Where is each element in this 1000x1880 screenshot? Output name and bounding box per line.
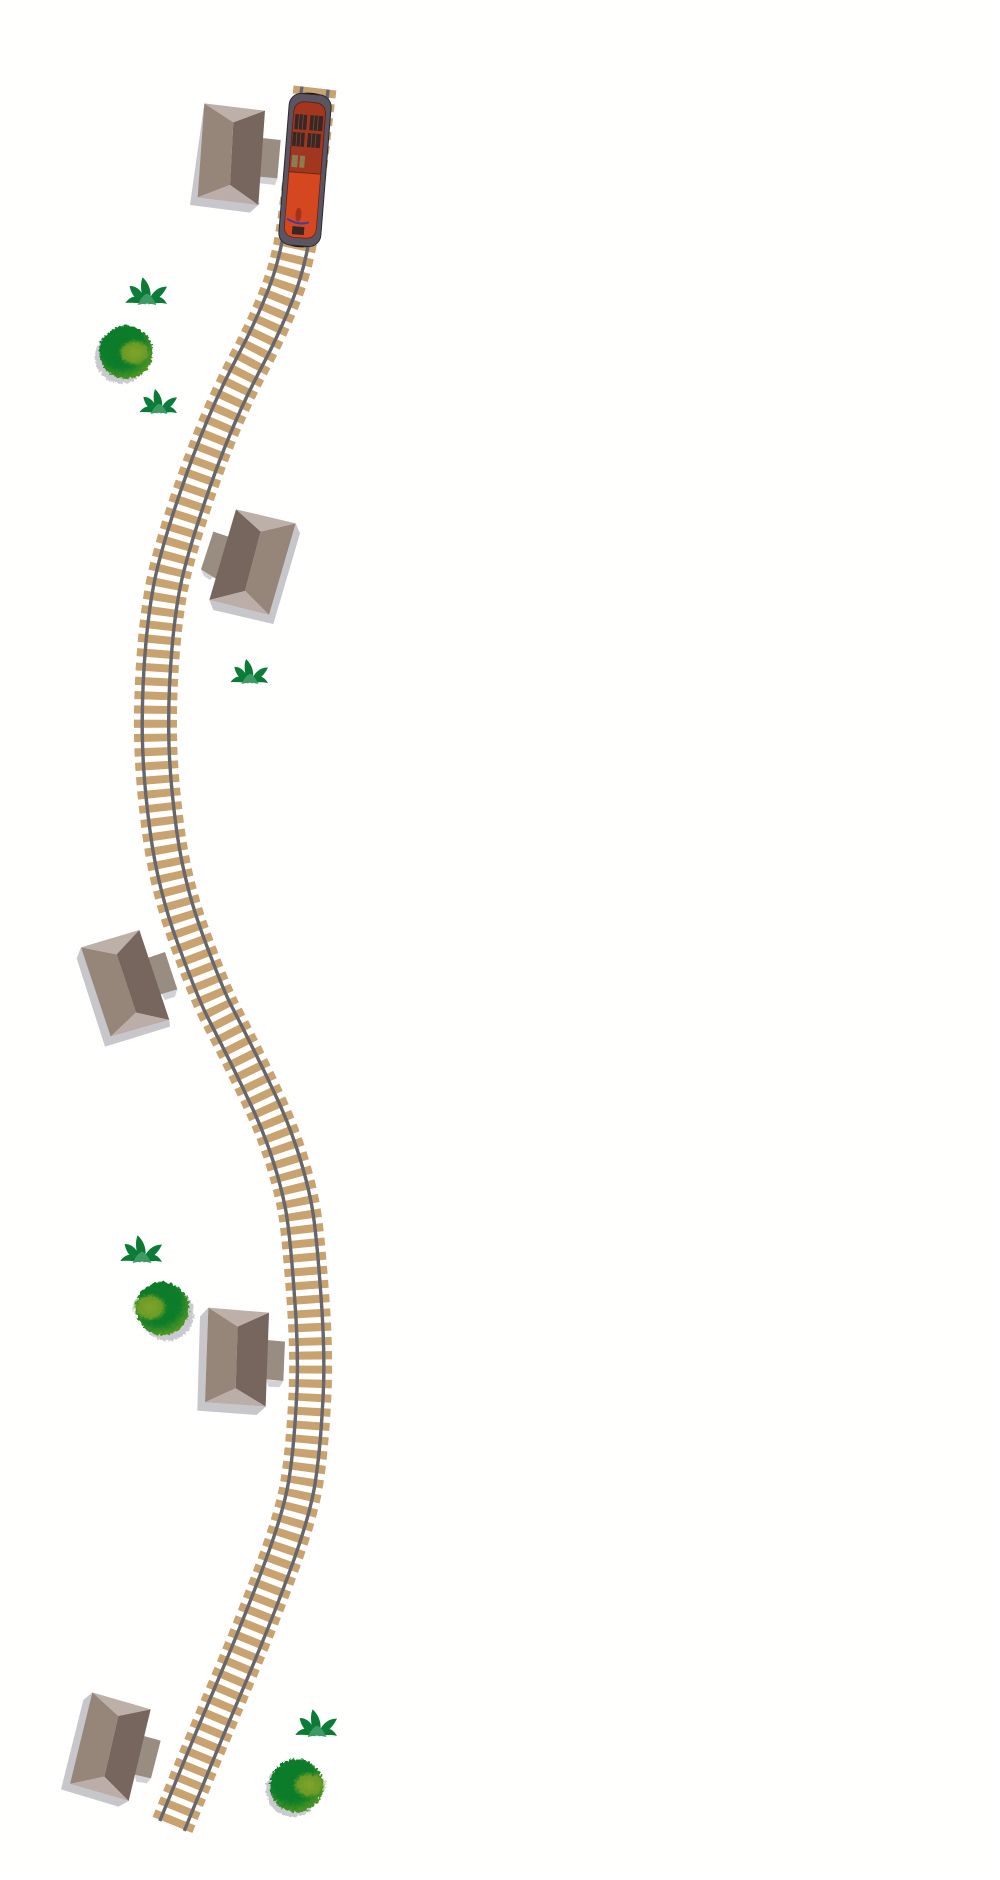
railway track bbox=[155, 88, 315, 1826]
train carriage bbox=[278, 91, 332, 249]
blue band bbox=[287, 219, 309, 224]
buffers bbox=[284, 92, 326, 248]
chassis bbox=[278, 93, 332, 247]
house 3 bbox=[77, 930, 177, 1047]
house 2 bbox=[201, 509, 300, 624]
grilles bbox=[285, 114, 323, 236]
roof rear section bbox=[289, 101, 326, 174]
grass 3 bbox=[230, 659, 268, 684]
house 1 bbox=[190, 103, 281, 213]
hatches bbox=[291, 155, 305, 168]
bush 3 bbox=[266, 1759, 327, 1817]
bush 1 bbox=[95, 326, 153, 383]
grass 1 bbox=[125, 277, 167, 305]
sleepers bbox=[155, 88, 315, 1826]
roof front section bbox=[284, 172, 321, 239]
grass 5 bbox=[295, 1709, 337, 1737]
bush 2 bbox=[132, 1282, 194, 1341]
house 5 bbox=[61, 1692, 161, 1807]
grass 2 bbox=[140, 389, 177, 414]
house 4 bbox=[197, 1308, 285, 1415]
grass 4 bbox=[120, 1235, 162, 1263]
grille slats bbox=[296, 114, 318, 148]
rails bbox=[155, 88, 315, 1826]
funnel bbox=[295, 207, 302, 222]
